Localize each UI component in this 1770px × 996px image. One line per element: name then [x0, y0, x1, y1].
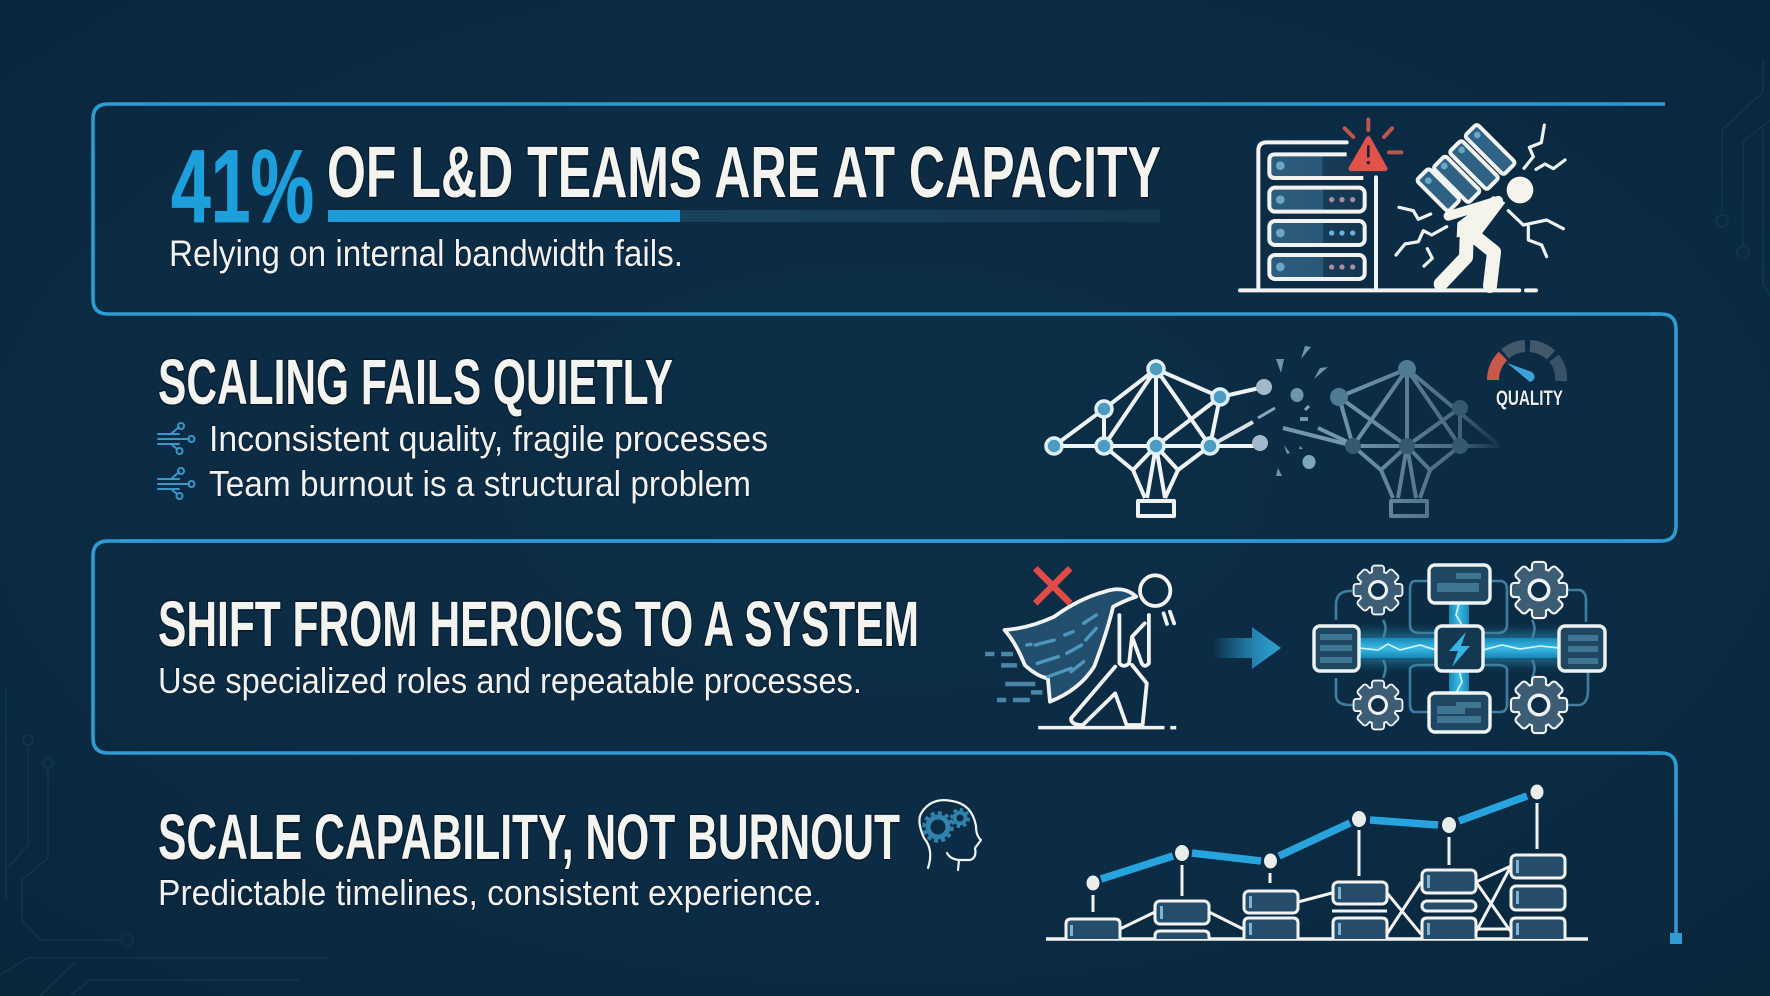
bullet 1 [158, 418, 768, 459]
panel: scale capability, not burnout [158, 753, 1682, 944]
trend line [1101, 796, 1527, 879]
server unit lights [1425, 132, 1481, 184]
subtext: relying on internal bandwidth: Relying on internal bandwidth fails. [169, 233, 683, 274]
trend nodes [1086, 784, 1544, 890]
hero body [1071, 575, 1174, 725]
circuit background decoration left [0, 690, 330, 996]
icon: overloaded server and strained person [1240, 119, 1565, 290]
panel 4 frame [1650, 753, 1676, 935]
panel 2 frame [120, 314, 1676, 541]
block highlights [1070, 860, 1519, 936]
subtext: specialized roles: Use specialized roles and repeatable processes. [158, 660, 862, 701]
heading: of L&D teams are at capacity: OF L&D TEAMS ARE AT CAPACITY [327, 133, 1161, 213]
icon: head with gears [919, 800, 981, 870]
progress bar [328, 210, 1160, 222]
bullet text 1: Inconsistent quality, fragile processes [209, 418, 768, 459]
circuit background decoration right [1716, 60, 1770, 295]
red X [1035, 568, 1070, 603]
lightning bolt [1449, 632, 1470, 667]
stacked blocks [1066, 855, 1565, 939]
carried server units [1416, 124, 1516, 212]
panel 3 frame [93, 541, 1661, 753]
server rack [1240, 142, 1536, 290]
subtext: predictable timelines: Predictable timelines, consistent experience. [158, 872, 822, 913]
gauge label: QUALITY [1496, 387, 1563, 410]
icon: warning triangle [1345, 119, 1401, 169]
icon: system diagram [1314, 563, 1605, 732]
heading: scaling fails quietly: SCALING FAILS QUIETLY [158, 346, 673, 418]
icon: fading network bridge [1330, 360, 1500, 516]
floor line [1046, 937, 1588, 941]
energy conduits [1355, 603, 1565, 695]
chart: rising capability on building blocks [1046, 784, 1588, 939]
strain lightning marks [1396, 125, 1565, 266]
panel 1 frame [93, 104, 1665, 314]
process boxes [1314, 565, 1605, 732]
bullet text 2: Team burnout is a structural problem [209, 463, 751, 504]
icon: broken debris [1258, 346, 1350, 476]
stat: 41%: 41% [171, 129, 314, 245]
bullet icon 2 [158, 468, 194, 499]
icon: tired hero with cape [985, 568, 1176, 728]
cape [1005, 589, 1136, 702]
frame end marker [1670, 933, 1682, 944]
gears [1354, 563, 1566, 732]
heading: shift from heroics to a system: SHIFT FROM HEROICS TO A SYSTEM [158, 588, 919, 660]
person figure [1441, 177, 1533, 286]
panel: shift from heroics to a system [93, 541, 1661, 753]
icon: quality gauge [1493, 346, 1563, 410]
icon: intact network bridge [1046, 361, 1272, 516]
arrow [1214, 627, 1281, 669]
bullet icon 1 [158, 423, 194, 454]
panel: 41% of L&D teams at capacity [93, 104, 1665, 314]
connecting lines [1093, 803, 1537, 934]
panel: scaling fails quietly [120, 314, 1676, 541]
process arrows [1336, 581, 1588, 712]
bullet 2 [158, 463, 751, 504]
speed lines [985, 654, 1042, 700]
heading: scale capability, not burnout: SCALE CAPABILITY, NOT BURNOUT [158, 801, 900, 873]
